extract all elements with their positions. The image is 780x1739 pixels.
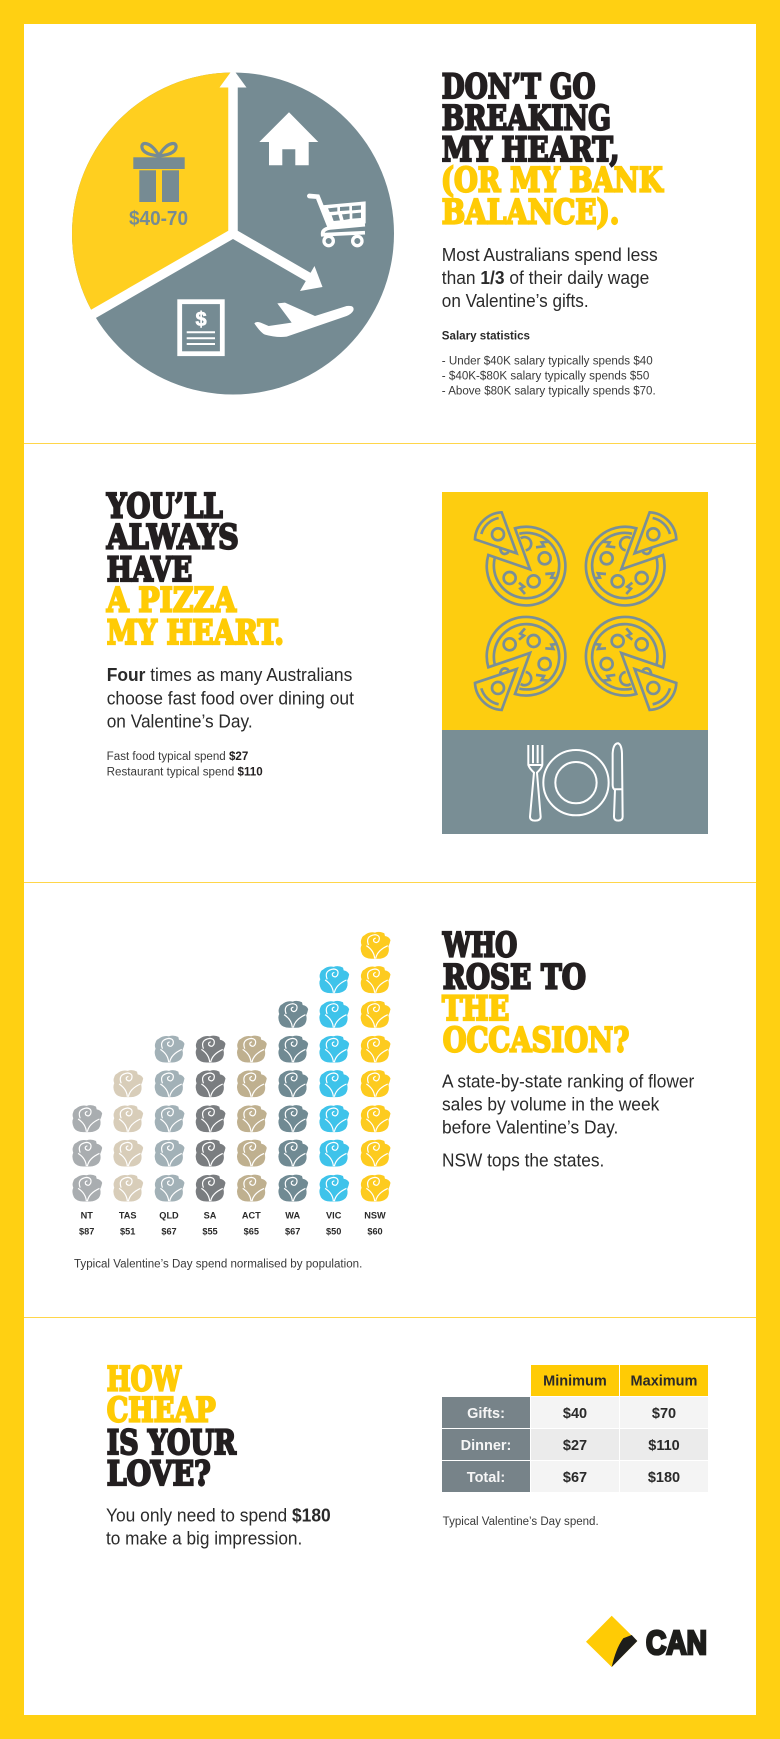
row: dinner: Dinner:	[461, 1438, 511, 1454]
table header: Minimum	[543, 1373, 607, 1389]
icon: house	[259, 112, 318, 165]
row: dinner	[442, 1429, 708, 1460]
heading: who rose to the occasion: THE	[442, 989, 509, 1028]
column: QLD: QLD	[159, 1210, 179, 1220]
column: SA: SA	[204, 1210, 217, 1220]
column: ACT: $65	[244, 1226, 259, 1236]
heading: how cheap is your love: IS YOUR	[107, 1423, 237, 1462]
icon: pizza bottom left	[475, 617, 565, 710]
column: TAS	[113, 1070, 143, 1236]
panel: pie chart of spending	[72, 69, 394, 394]
heading: don't go breaking my heart: BALANCE).	[442, 192, 619, 231]
column: TAS: $51	[120, 1226, 135, 1236]
table header	[531, 1365, 708, 1396]
row: total: $67	[563, 1470, 587, 1486]
text: typical spend: Restaurant typical spend $110	[107, 767, 263, 779]
heading: how cheap is your love: HOW	[107, 1360, 182, 1399]
pie segment: gifts	[72, 72, 233, 314]
column: NSW: $60	[367, 1226, 383, 1236]
row: dinner: $110	[648, 1438, 680, 1454]
heading: don't go breaking my heart: MY HEART,	[442, 130, 619, 169]
pie segment: other spend	[72, 72, 394, 394]
text: salary statistics	[442, 330, 656, 397]
heading: don't go breaking my heart: (OR MY BANK	[441, 161, 664, 200]
row: total: Total:	[467, 1470, 505, 1486]
column: VIC: VIC	[326, 1210, 342, 1220]
text: typical spend	[107, 751, 263, 779]
table: min and max spend	[442, 1365, 708, 1492]
heading: who rose to the occasion: OCCASION?	[443, 1021, 629, 1060]
column: TAS: TAS	[119, 1210, 137, 1220]
column: QLD	[155, 1036, 184, 1236]
row: dinner: $27	[563, 1438, 587, 1454]
gift spend label: $40-70	[129, 208, 188, 230]
text: salary statistics: - Under $40K salary typically spends $40	[442, 355, 653, 367]
text: state ranking: sales by volume in the week	[442, 1094, 660, 1114]
row: total	[442, 1461, 708, 1492]
text: four times	[107, 665, 354, 731]
heading: who rose to the occasion	[442, 926, 629, 1060]
heading: don't go breaking my heart	[441, 67, 664, 231]
heading: pizza my heart	[106, 486, 284, 652]
chart caption: Typical Valentine’s Day spend normalised by population.	[74, 1258, 362, 1270]
icon: pizza top left	[475, 512, 565, 605]
text: spend to impress: You only need to spend $180	[106, 1506, 331, 1526]
heading: don't go breaking my heart: DON’T GO	[442, 67, 596, 106]
text: salary statistics: - $40K-$80K salary typically spends $50	[442, 370, 649, 382]
table caption: Typical Valentine’s Day spend.	[443, 1516, 599, 1528]
text: daily wage: than 1/3 of their daily wage	[442, 268, 649, 288]
column: SA: $55	[202, 1226, 218, 1236]
column: WA: $67	[285, 1226, 300, 1236]
heading: who rose to the occasion: ROSE TO	[443, 957, 586, 996]
icon: plate	[543, 750, 609, 815]
panel: plate and cutlery	[442, 730, 708, 834]
table header: Maximum	[631, 1373, 697, 1389]
text: daily wage	[442, 245, 658, 311]
heading: how cheap is your love	[107, 1360, 237, 1493]
row: gifts: $40	[563, 1406, 587, 1422]
heading: pizza my heart: HAVE	[107, 550, 192, 589]
text: daily wage: Most Australians spend less	[442, 245, 658, 265]
icon: pizza top right	[586, 512, 676, 605]
column: SA	[196, 1036, 226, 1236]
row: gifts: Gifts:	[467, 1406, 505, 1422]
logo: CAN: CAN	[646, 1625, 707, 1662]
column: ACT	[237, 1036, 267, 1236]
text: state ranking: before Valentine’s Day.	[442, 1117, 618, 1137]
text: daily wage: on Valentine’s gifts.	[442, 291, 589, 311]
row: total: $180	[648, 1470, 680, 1486]
heading: pizza my heart: YOU’LL	[106, 486, 223, 525]
text: state ranking: A state-by-state ranking of flower	[442, 1071, 694, 1091]
icon: invoice: $	[195, 309, 207, 331]
text: spend to impress: to make a big impression.	[106, 1529, 302, 1549]
text: state ranking	[442, 1071, 694, 1171]
chart: roses by state	[72, 932, 390, 1236]
icon: plane	[254, 303, 354, 337]
panel: pizzas on yellow	[442, 492, 708, 730]
column: WA	[278, 1001, 308, 1236]
text: four times: Four times as many Australians	[107, 665, 352, 685]
row: gifts	[442, 1397, 708, 1428]
spokes and arrows	[88, 69, 322, 317]
heading: who rose to the occasion: WHO	[442, 926, 517, 965]
icon: knife	[613, 743, 623, 821]
column: NT: $87	[79, 1226, 94, 1236]
row: gifts: $70	[652, 1406, 676, 1422]
icon: gift	[133, 144, 185, 202]
heading: pizza my heart: ALWAYS	[106, 517, 239, 556]
heading: how cheap is your love: CHEAP	[107, 1391, 216, 1430]
text: salary statistics: - Above $80K salary typically spends $70.	[442, 385, 656, 397]
icon: invoice	[180, 302, 222, 354]
heading: pizza my heart: MY HEART.	[107, 613, 284, 652]
column: NSW	[361, 932, 390, 1236]
column: VIC	[319, 966, 349, 1236]
heading: how cheap is your love: LOVE?	[107, 1454, 211, 1493]
icon: fork	[528, 745, 542, 821]
column: ACT: ACT	[242, 1210, 261, 1220]
text: state ranking: NSW tops the states.	[442, 1151, 604, 1171]
text: spend to impress	[106, 1506, 331, 1549]
text: typical spend: Fast food typical spend $27	[107, 751, 248, 763]
text: four times: choose fast food over dining out	[107, 688, 354, 708]
column: QLD: $67	[161, 1226, 177, 1236]
logo: CAN	[586, 1616, 707, 1667]
text: four times: on Valentine’s Day.	[107, 711, 253, 731]
column: NSW: NSW	[364, 1210, 386, 1220]
heading: pizza my heart: A PIZZA	[106, 581, 237, 620]
column: NT	[72, 1105, 102, 1236]
text: salary statistics: Salary statistics	[442, 330, 530, 342]
column: WA: WA	[285, 1210, 300, 1220]
column: VIC: $50	[326, 1226, 341, 1236]
icon: shopping cart	[309, 196, 366, 246]
icon: pizza bottom right	[586, 617, 676, 710]
heading: don't go breaking my heart: BREAKING	[442, 98, 611, 137]
column: NT: NT	[81, 1210, 93, 1220]
